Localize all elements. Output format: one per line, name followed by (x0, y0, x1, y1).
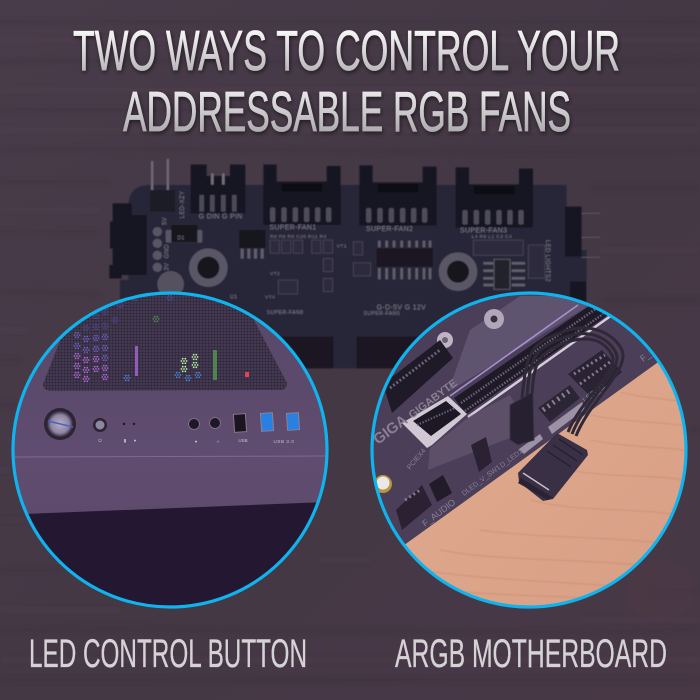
LED indicators (123, 423, 135, 425)
capacitor (157, 271, 184, 298)
LED-XZY pin header (150, 159, 175, 212)
mounting hole left (189, 248, 228, 287)
small silk-screen labels: G-D-5V G 12V (377, 304, 426, 311)
silkscreen labels: PCIEX4 (406, 448, 428, 471)
transparent reinforced section (428, 395, 514, 470)
blue ring (372, 293, 686, 607)
SOIC chip right (483, 259, 525, 289)
fan header 2 (359, 165, 437, 226)
capacitor (376, 475, 392, 493)
F_AUDIO header (396, 485, 432, 530)
fan header 3 (456, 167, 533, 228)
small silk-screen labels: VT4 (265, 294, 275, 300)
header label tags (519, 402, 585, 454)
small silk-screen labels: L4 R8 L1 C3 C4 (472, 234, 512, 240)
screw (437, 332, 453, 348)
wood grain (432, 392, 684, 598)
resistor rows (270, 240, 545, 294)
port legends: ▮ (124, 438, 127, 443)
small silk-screen labels: G DIN G PIN (199, 213, 243, 220)
PC case top panel (14, 318, 326, 514)
silkscreen labels: GIGA (370, 411, 411, 448)
port legends: USB (238, 438, 248, 443)
diode D1 (166, 225, 202, 243)
small PCIe x1 slot (402, 396, 467, 448)
right side connector and pins (565, 207, 600, 303)
large PCIe slot (450, 302, 612, 417)
lower fan header row (267, 330, 530, 368)
small silk-screen labels: SUPER-FAN2 (366, 226, 413, 233)
circle: LED control button photo (11, 291, 329, 609)
port legends: USB 3.0 (274, 439, 294, 444)
silkscreen labels: F_U (638, 345, 658, 364)
board body (120, 185, 587, 368)
metal mount hole (484, 309, 504, 329)
RGB fan glow (74, 295, 249, 382)
dark window below case (28, 502, 316, 606)
small silk-screen labels: LED LIGHTS2 (544, 240, 550, 282)
solder pads left (153, 227, 162, 272)
small silk-screen labels: VT2 (270, 271, 280, 277)
USB pin header (568, 350, 622, 398)
audio jacks (188, 418, 220, 430)
port legends (98, 438, 294, 443)
front I/O panel controls (44, 408, 300, 444)
case seam (0, 456, 340, 457)
silkscreen labels: F_AUDIO (420, 497, 457, 529)
G DIN G PIN connector (191, 165, 245, 213)
PCB fan hub controller (109, 159, 600, 368)
small silk-screen labels: 5V (163, 217, 169, 225)
ARGB cable loop (522, 328, 623, 436)
small silk-screen labels: U1 (230, 294, 237, 300)
upper left PCIe slot (383, 340, 453, 413)
USB 2.0 port (233, 414, 247, 432)
motherboard (374, 294, 658, 544)
circle: ARGB motherboard photo (360, 285, 700, 615)
label: LED control button: LED CONTROL BUTTON (29, 632, 307, 676)
port legends: ● (195, 439, 198, 444)
small silk-screen labels: 3V (164, 263, 170, 271)
silkscreen labels: D_LED1 (499, 448, 524, 470)
ARGB connector plug (518, 433, 588, 501)
port legends: ● (134, 438, 137, 443)
small silk-screen labels: VT1 (337, 243, 347, 249)
silkscreen labels: LED_C (581, 382, 607, 405)
port legends: ∩ (216, 439, 220, 444)
mounting hole right (439, 252, 477, 291)
small silk-screen labels: SUPER-FAN8 (267, 310, 303, 316)
RGB pin row (538, 385, 580, 422)
blue ring (13, 293, 327, 607)
small silk-screen labels (163, 191, 550, 317)
dupont connector on pins (510, 392, 534, 445)
wood surface (405, 362, 684, 606)
small silk-screen labels: R8 R9 R9 C20 R11 R4 (270, 234, 327, 240)
small silk-screen labels: GND (164, 244, 170, 258)
silkscreen labels: DLED_V_SW1 (461, 464, 502, 498)
silkscreen labels: GIGABYTE (407, 377, 460, 421)
title (73, 19, 620, 144)
DLED jumper (471, 437, 492, 472)
LED control button (44, 408, 76, 440)
striped copper zone (448, 296, 590, 392)
silkscreen labels (370, 345, 658, 529)
left side connector (109, 203, 147, 278)
case mesh grille (43, 294, 287, 391)
small silk-screen labels: LED-XZY (180, 191, 186, 218)
small silk-screen labels: D1 (177, 235, 185, 241)
small silk-screen labels: SUPER-FAN5 (363, 311, 400, 317)
IC chip Q8 (239, 230, 265, 259)
IC chip U5 (377, 241, 433, 279)
jumper header (429, 475, 452, 502)
fan headers (263, 165, 341, 225)
USB 3.0 port two (286, 413, 300, 430)
small silk-screen labels: SUPER-FAN1 (269, 224, 317, 231)
small silk-screen labels: SUPER-FAN3 (460, 227, 507, 234)
reset button (93, 418, 107, 432)
USB 3.0 port (260, 413, 274, 431)
port legends: ⏻ (98, 438, 102, 443)
